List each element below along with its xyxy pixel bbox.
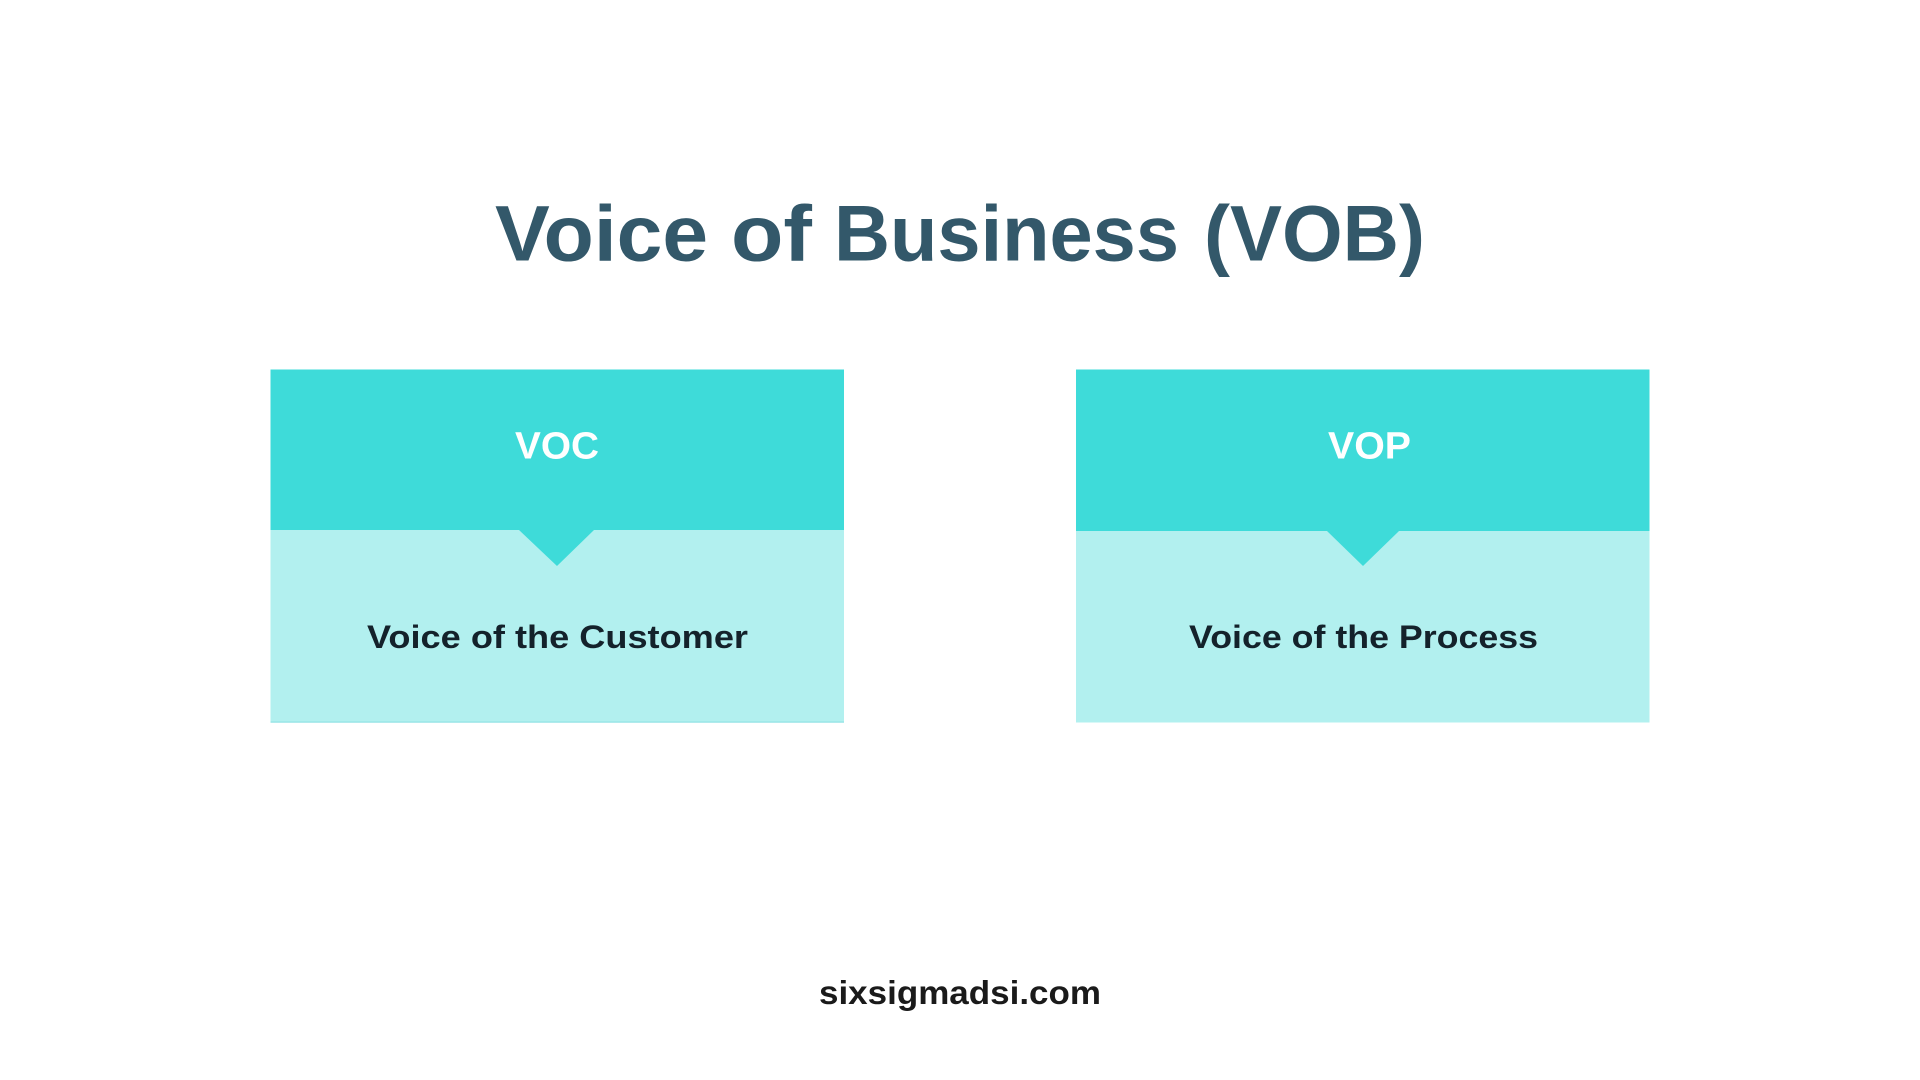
VOP description: Voice of the Process: [1189, 619, 1538, 655]
title: [495, 188, 1425, 278]
VOC pointer: [519, 530, 594, 566]
VOC description: Voice of the Customer: [367, 619, 748, 655]
VOP pointer: [1327, 531, 1399, 566]
VOP heading: VOP: [1328, 426, 1411, 468]
VOP lower body: [1076, 531, 1650, 722]
title: (VOB): [1204, 188, 1425, 278]
panel: VOC: [270, 370, 844, 723]
footer website: sixsigmadsi.com: [819, 974, 1101, 1011]
VOC bottom edge: [270, 722, 844, 723]
title: Business: [834, 188, 1179, 278]
VOC heading: VOC: [515, 426, 599, 468]
VOC lower body: [270, 530, 844, 722]
VOC header band: [270, 370, 844, 530]
title: Voice: [495, 188, 708, 278]
panel: VOP: [1076, 370, 1650, 722]
VOP header band: [1076, 370, 1650, 531]
title: of: [731, 188, 813, 278]
